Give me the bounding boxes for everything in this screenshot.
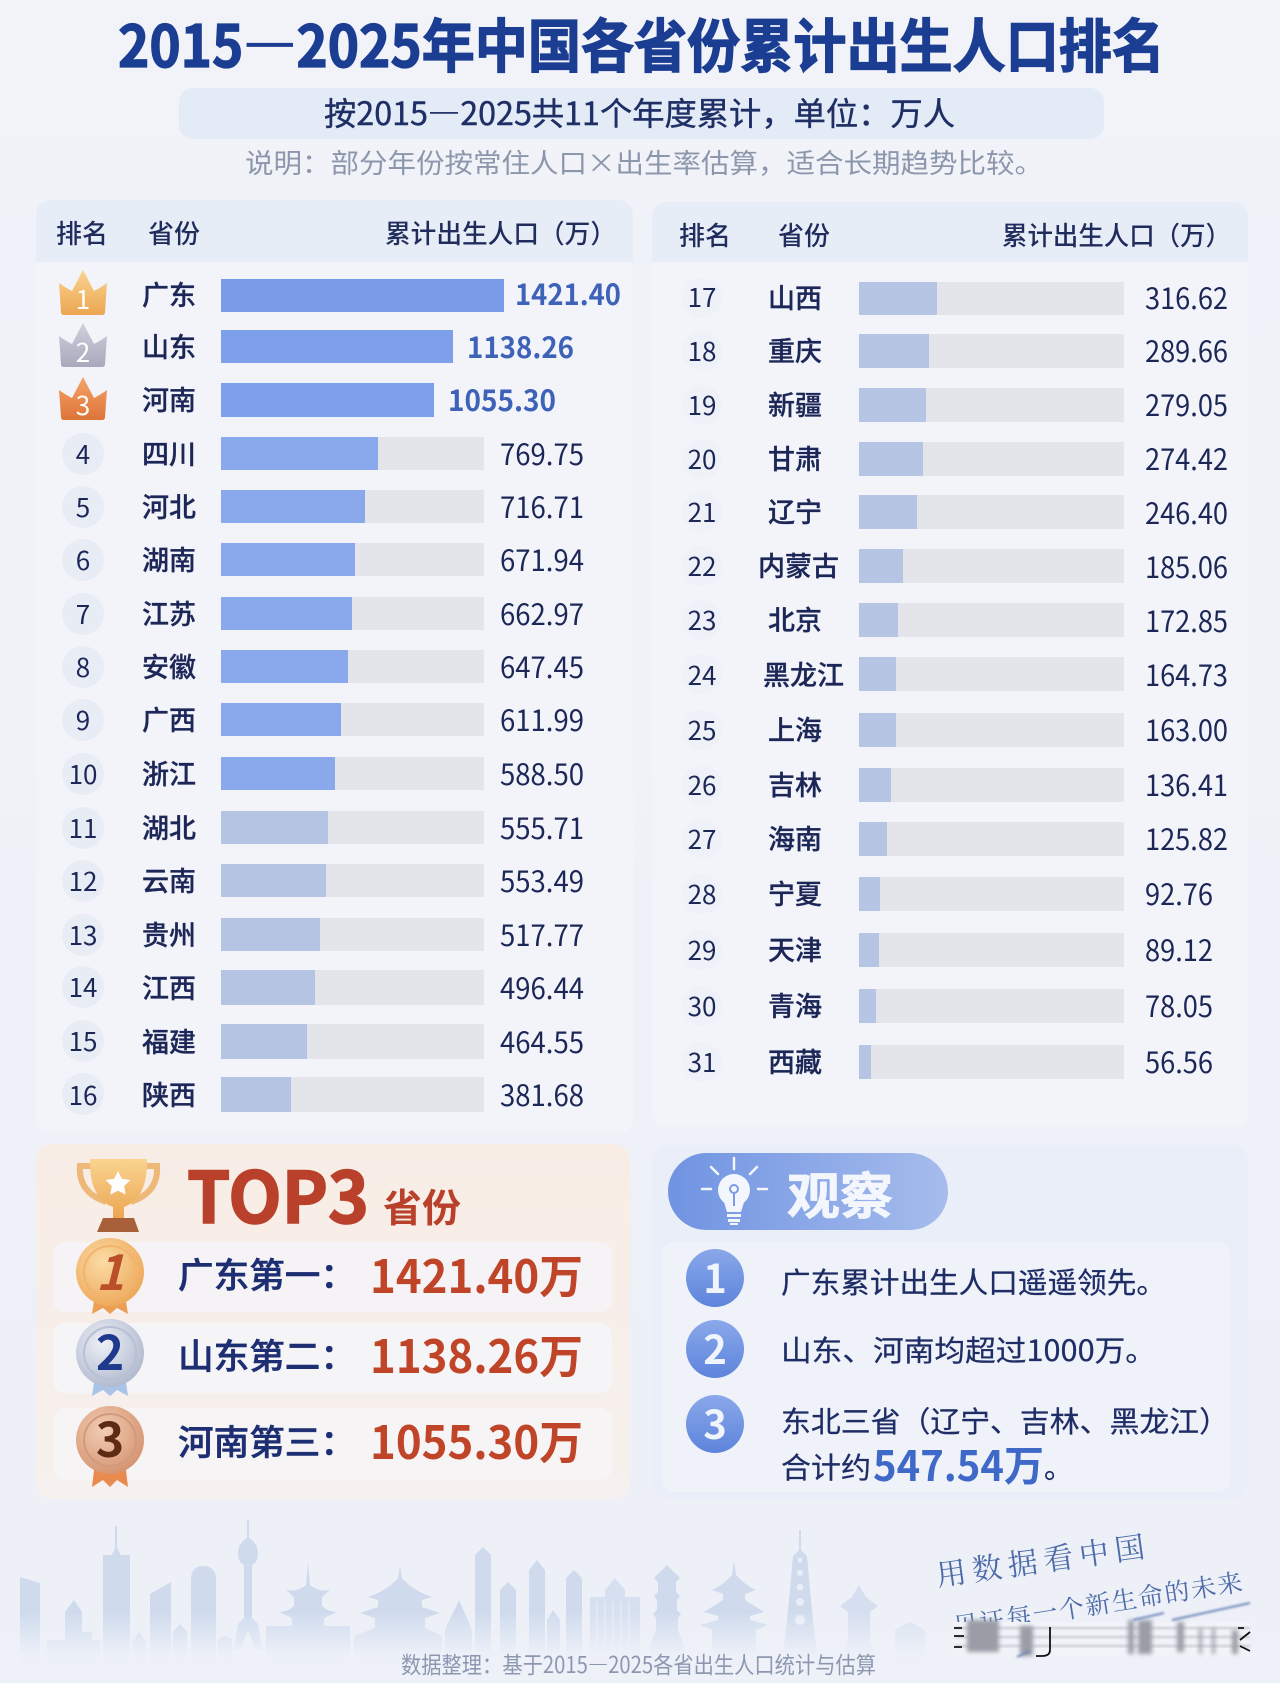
table header left (36, 200, 633, 262)
row 16: 陕西 (142, 1074, 196, 1113)
row 26: 吉林 (768, 764, 822, 803)
row 5 (62, 485, 584, 528)
observation 1: 广东累计出生人口遥遥领先。 (781, 1260, 1166, 1302)
row 25: 25 (688, 711, 716, 748)
row 31 (682, 1040, 1213, 1082)
row 23: 23 (688, 601, 716, 638)
row 15 (62, 1020, 584, 1062)
heading pill (668, 1153, 948, 1230)
row 21 (682, 491, 1228, 533)
row: 3rd place (53, 1401, 612, 1487)
row 24: 164.73 (1145, 653, 1228, 695)
row 16 (62, 1073, 584, 1115)
row 7: 江苏 (142, 593, 196, 632)
row 6: 671.94 (500, 538, 584, 580)
skyline illustration (0, 1520, 1280, 1683)
observation 3: 3 (703, 1393, 727, 1451)
row 25: 163.00 (1145, 708, 1228, 750)
explanatory note: 说明：部分年份按常住人口×出生率估算，适合长期趋势比较。 (245, 142, 1043, 181)
observation 3 (686, 1393, 1229, 1494)
table header left: 累计出生人口（万） (385, 214, 616, 251)
observation 1 (686, 1247, 1166, 1307)
row 28: 28 (688, 875, 716, 912)
row 9: 9 (76, 701, 90, 738)
observation 1: 1 (703, 1247, 727, 1305)
row 11 (62, 806, 584, 849)
row 27: 27 (688, 820, 716, 857)
row 8: 安徽 (142, 646, 196, 685)
row 24: 黑龙江 (763, 654, 844, 693)
row 20: 甘肃 (768, 438, 822, 477)
row 12: 12 (69, 862, 97, 899)
row 15: 福建 (142, 1021, 196, 1060)
row 6 (62, 538, 584, 581)
footer source note: 数据整理：基于2015—2025各省出生人口统计与估算 (401, 1646, 876, 1680)
row 13: 517.77 (500, 913, 584, 955)
row 11: 11 (69, 809, 97, 846)
row 12 (62, 859, 584, 902)
blurred watermark (953, 1603, 1250, 1657)
skyline fade (0, 1612, 1280, 1683)
row 18: 18 (688, 332, 716, 369)
observation 3: 合计约 (781, 1445, 871, 1487)
row 16: 16 (69, 1076, 97, 1113)
row 24 (682, 653, 1228, 695)
row 13: 13 (69, 916, 97, 953)
row 3 (59, 377, 556, 423)
table header right: 累计出生人口（万） (1002, 216, 1231, 253)
row 29 (682, 928, 1213, 970)
row: 2nd place: 山东第二： (178, 1329, 356, 1380)
icon: trophy (80, 1159, 157, 1232)
table header right (652, 202, 1248, 262)
panel: ranking 17-31 (652, 202, 1248, 1127)
row 23: 172.85 (1145, 599, 1228, 641)
row 20: 20 (688, 440, 716, 477)
row 18: 289.66 (1145, 329, 1228, 371)
row 7 (62, 592, 584, 635)
row 19: 新疆 (768, 384, 822, 423)
row 23: 北京 (768, 599, 822, 638)
row 1: 广东 (142, 274, 196, 313)
row 28 (682, 872, 1213, 914)
row 25 (682, 708, 1228, 750)
row: 2nd place (53, 1314, 612, 1396)
observation 2: 2 (703, 1318, 727, 1376)
observation 3: 。 (1044, 1445, 1073, 1487)
row 22: 内蒙古 (758, 545, 839, 584)
row 21: 21 (688, 493, 716, 530)
row 4: 769.75 (500, 432, 584, 474)
row 3: 1055.30 (448, 378, 556, 420)
row 30: 78.05 (1145, 984, 1213, 1026)
row 2 (59, 323, 574, 370)
row 12: 553.49 (500, 859, 584, 901)
row 14 (62, 966, 584, 1008)
row 17: 316.62 (1145, 276, 1228, 318)
row 10: 10 (69, 755, 97, 792)
row: 2nd place: 1138.26万 (370, 1321, 583, 1387)
row 31: 31 (688, 1043, 716, 1080)
row 10: 588.50 (500, 752, 584, 794)
heading: TOP3 (187, 1142, 461, 1244)
row 17: 17 (688, 278, 716, 315)
row 5: 716.71 (500, 485, 584, 527)
row 13: 贵州 (142, 914, 196, 953)
row 5: 河北 (142, 486, 196, 525)
table header left: 排名 (56, 214, 108, 251)
observation 2: 山东、河南均超过1000万。 (781, 1328, 1156, 1370)
row 11: 湖北 (142, 807, 196, 846)
row 10: 浙江 (142, 753, 196, 792)
row: 3rd place: 1055.30万 (370, 1407, 583, 1473)
row 3: 河南 (142, 379, 196, 418)
row 27: 海南 (768, 818, 822, 857)
observation 3: 东北三省（辽宁、吉林、黑龙江） (781, 1399, 1229, 1441)
row 15: 464.55 (500, 1020, 584, 1062)
row 30: 青海 (768, 985, 822, 1024)
row 18 (682, 329, 1228, 371)
row: 1st place: 1421.40万 (370, 1241, 583, 1307)
row 1 (59, 270, 621, 317)
row 1: 1 (76, 280, 90, 317)
row 2: 1138.26 (467, 325, 574, 367)
row: 3rd place: 河南第三： (178, 1415, 356, 1466)
handwriting slogan (933, 1521, 1246, 1644)
heading: TOP3: 省份 (383, 1178, 461, 1234)
panel: observations (652, 1145, 1248, 1499)
row 8 (62, 645, 584, 688)
table header left: 省份 (148, 214, 200, 251)
row 17 (682, 276, 1228, 318)
row 6: 6 (76, 541, 90, 578)
handwriting slogan: 见证每一个新生命的未来 (951, 1562, 1246, 1644)
heading pill: 观察 (787, 1157, 893, 1229)
row 27 (682, 817, 1228, 859)
row 20 (682, 437, 1228, 479)
row 29: 89.12 (1145, 928, 1213, 970)
subtitle pill (179, 88, 1104, 139)
row 20: 274.42 (1145, 437, 1228, 479)
row: 1st place: 1 (96, 1234, 124, 1304)
row 22 (682, 545, 1228, 587)
row 14: 496.44 (500, 966, 584, 1008)
row: 3rd place: 3 (96, 1401, 124, 1471)
row 30 (682, 984, 1213, 1026)
row 13 (62, 913, 584, 956)
row 28: 92.76 (1145, 872, 1213, 914)
row 2: 山东 (142, 326, 196, 365)
row 7: 7 (76, 595, 90, 632)
heading: TOP3: TOP3 (187, 1142, 369, 1244)
row 14: 江西 (142, 967, 196, 1006)
row 30: 30 (688, 987, 716, 1024)
row 11: 555.71 (500, 806, 584, 848)
icon: light bulb (702, 1158, 767, 1225)
row 16: 381.68 (500, 1073, 584, 1115)
row 22: 22 (688, 547, 716, 584)
observation 2 (686, 1318, 1156, 1378)
row 6: 湖南 (142, 539, 196, 578)
row 19: 279.05 (1145, 383, 1228, 425)
row 21: 辽宁 (768, 491, 822, 530)
row 3: 3 (76, 386, 90, 423)
row 4 (62, 432, 584, 475)
row 19 (682, 383, 1228, 425)
row 26 (682, 763, 1228, 805)
row 15: 15 (69, 1022, 97, 1059)
row 31: 56.56 (1145, 1040, 1213, 1082)
panel: ranking 1-16 (36, 200, 633, 1133)
row 24: 24 (688, 656, 716, 693)
panel: TOP3 (36, 1142, 630, 1499)
row 28: 宁夏 (768, 873, 822, 912)
row 8: 647.45 (500, 645, 584, 687)
observation 3: 547.54万 (873, 1433, 1044, 1494)
row 21: 246.40 (1145, 491, 1228, 533)
row 31: 西藏 (768, 1041, 822, 1080)
row 26: 136.41 (1145, 763, 1228, 805)
row 23 (682, 599, 1228, 641)
handwriting slogan: 用数据看中国 (933, 1521, 1153, 1595)
row 4: 四川 (142, 433, 196, 472)
row 8: 8 (76, 648, 90, 685)
row: 1st place: 广东第一： (178, 1248, 356, 1299)
row 18: 重庆 (768, 330, 822, 369)
row 2: 2 (76, 333, 90, 370)
row 9: 广西 (142, 699, 196, 738)
row 12: 云南 (142, 860, 196, 899)
inner card (662, 1242, 1230, 1492)
row 27: 125.82 (1145, 817, 1228, 859)
table header right: 排名 (679, 216, 731, 253)
row 9 (62, 698, 584, 741)
row 7: 662.97 (500, 592, 584, 634)
row 9: 611.99 (500, 698, 584, 740)
row 19: 19 (688, 386, 716, 423)
row 25: 上海 (768, 709, 822, 748)
row 14: 14 (69, 968, 97, 1005)
table header right: 省份 (778, 216, 830, 253)
row 17: 山西 (768, 277, 822, 316)
row: 1st place (53, 1234, 612, 1314)
row 5: 5 (76, 488, 90, 525)
row 26: 26 (688, 766, 716, 803)
row 29: 天津 (768, 929, 822, 968)
title: 2015—2025年中国各省份累计出生人口排名 (118, 0, 1165, 84)
row 4: 4 (76, 435, 90, 472)
row 22: 185.06 (1145, 545, 1228, 587)
row 10 (62, 752, 584, 795)
row 29: 29 (688, 931, 716, 968)
row 1: 1421.40 (515, 272, 621, 314)
row: 2nd place: 2 (96, 1314, 124, 1384)
subtitle pill: 按2015—2025共11个年度累计，单位：万人 (324, 89, 955, 135)
